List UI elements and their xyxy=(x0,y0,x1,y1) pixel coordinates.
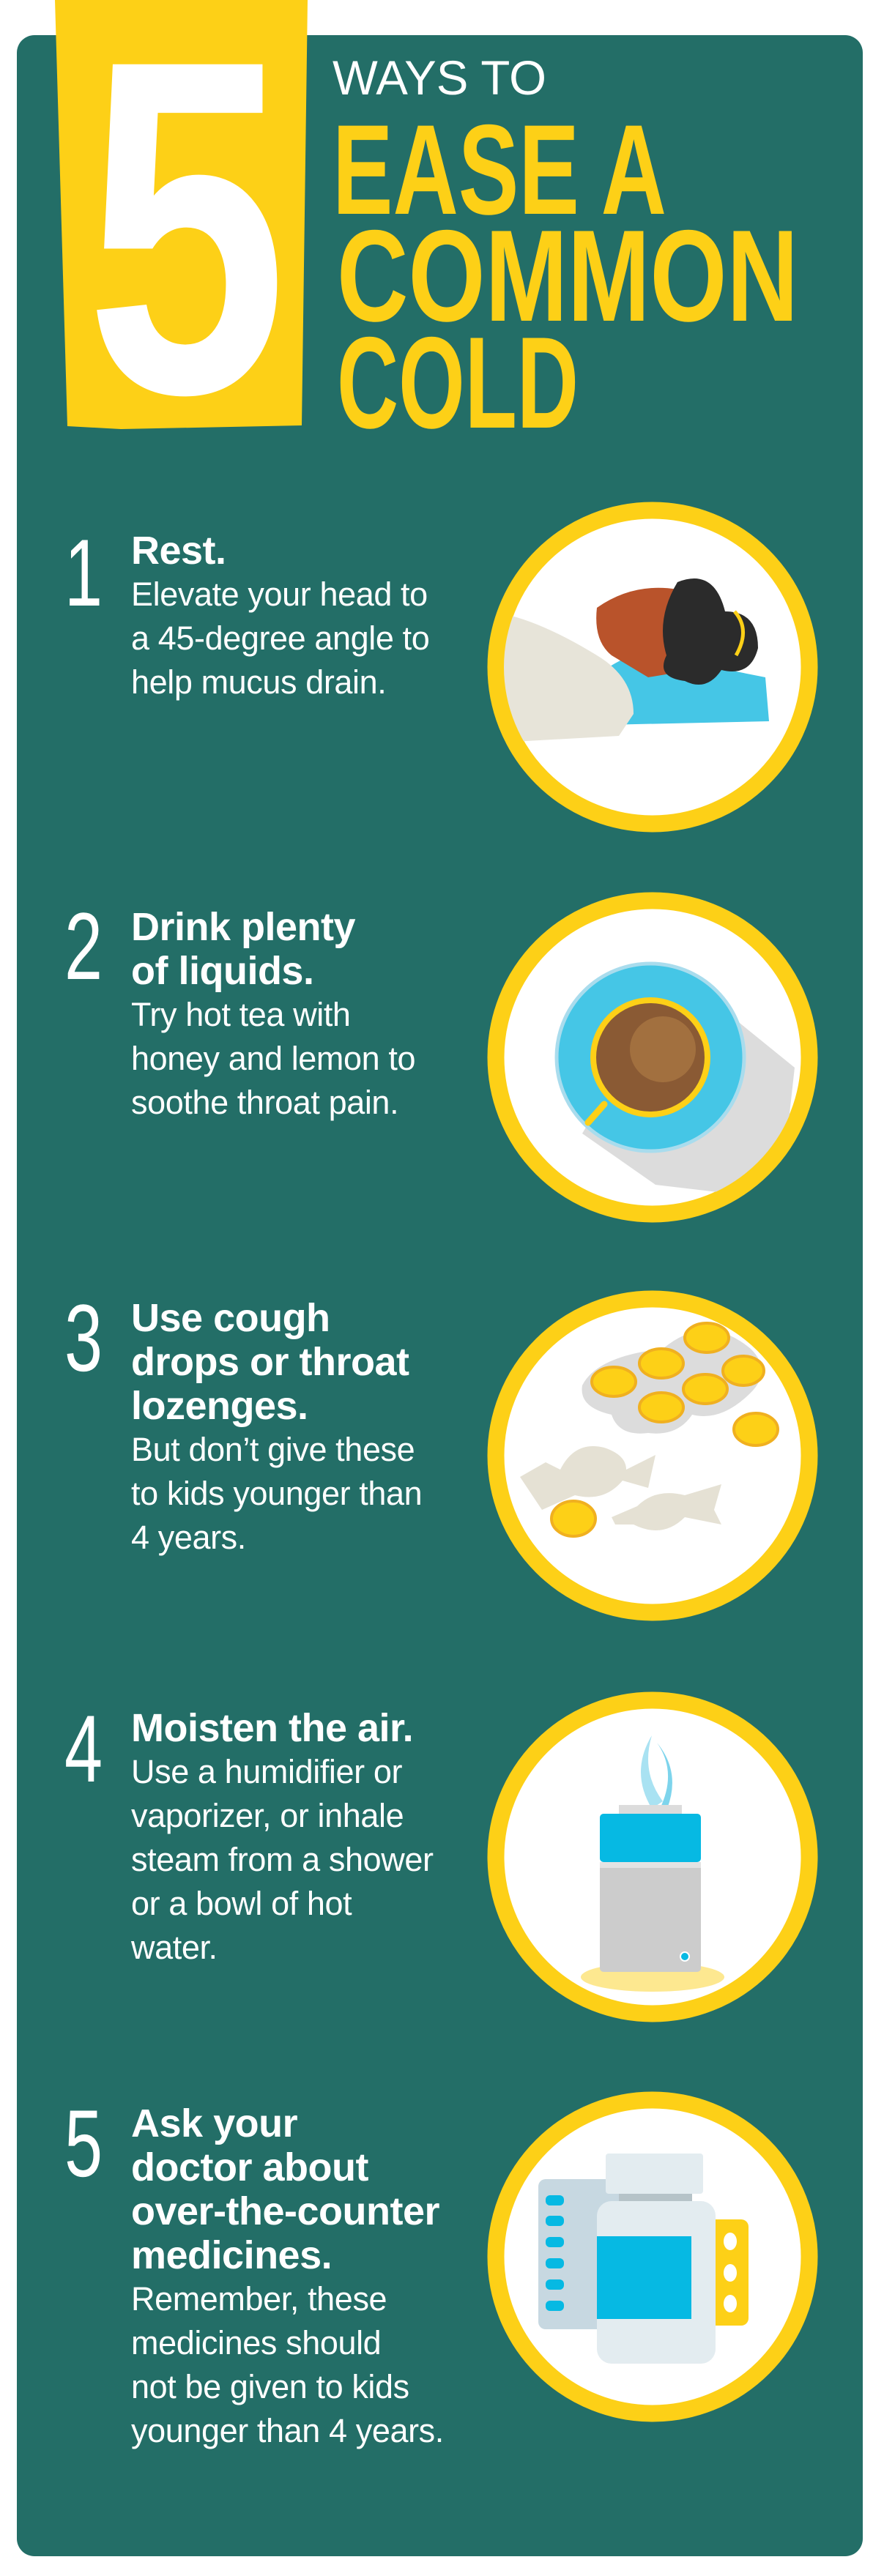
item 4 text: water. xyxy=(131,1929,218,1966)
item 4 text: Moisten the air. xyxy=(131,1706,413,1750)
item 4 text: Use a humidifier or xyxy=(131,1753,402,1790)
item 5 text: medicines should xyxy=(131,2324,381,2361)
illustration 3: lozenges xyxy=(488,1290,817,1621)
item 5 text: Remember, these xyxy=(131,2280,387,2318)
illustration 5: medicines xyxy=(488,2091,817,2422)
number 4: 4 xyxy=(64,1695,103,1802)
item 2 text: Drink plenty xyxy=(131,905,355,949)
item 5 text: doctor about xyxy=(131,2145,368,2189)
item 1 text xyxy=(131,529,429,701)
illustration 1: resting xyxy=(488,502,817,832)
item 5 text: medicines. xyxy=(131,2233,332,2277)
item 5 text: Ask your xyxy=(131,2102,297,2145)
item 4 text: steam from a shower xyxy=(131,1841,434,1878)
item 1 text: help mucus drain. xyxy=(131,663,386,701)
item 2 text: honey and lemon to xyxy=(131,1040,415,1077)
item 1 text: a 45-degree angle to xyxy=(131,619,429,657)
item 2 text: soothe throat pain. xyxy=(131,1084,398,1121)
item 1 text: Elevate your head to xyxy=(131,576,428,613)
item 5 text: not be given to kids xyxy=(131,2368,409,2405)
item 3 text: Use cough xyxy=(131,1296,330,1340)
yellow banner with big 5 xyxy=(55,0,308,493)
item 5 text: younger than 4 years. xyxy=(131,2412,444,2449)
number 1: 1 xyxy=(64,519,103,626)
item 4 text: vaporizer, or inhale xyxy=(131,1797,404,1834)
item 4 text xyxy=(130,1706,434,1966)
number 2: 2 xyxy=(64,893,103,999)
title text: EASE A xyxy=(333,99,666,242)
item 2 text: Try hot tea with xyxy=(131,996,351,1033)
item 3 text: drops or throat xyxy=(131,1340,409,1384)
item 5 text: over-the-counter xyxy=(131,2189,439,2233)
item 2 text: of liquids. xyxy=(131,949,313,993)
item 3 text: But don’t give these xyxy=(131,1431,415,1468)
number 3: 3 xyxy=(64,1284,103,1391)
item 5 text xyxy=(131,2102,444,2449)
item 3 text: 4 years. xyxy=(131,1519,246,1556)
item 3 text: to kids younger than xyxy=(131,1475,422,1512)
title text xyxy=(333,51,798,455)
number 5: 5 xyxy=(64,2090,103,2197)
illustration 4: humidifier xyxy=(488,1691,817,2022)
item 2 text xyxy=(131,905,415,1121)
item 3 text xyxy=(131,1296,422,1556)
title block xyxy=(55,0,798,439)
title text: WAYS TO xyxy=(333,51,546,105)
item 3 text: lozenges. xyxy=(131,1384,308,1428)
item 1 text: Rest. xyxy=(131,529,226,573)
item 4 text: or a bowl of hot xyxy=(131,1885,352,1922)
illustration 2: tea cup xyxy=(488,892,817,1223)
